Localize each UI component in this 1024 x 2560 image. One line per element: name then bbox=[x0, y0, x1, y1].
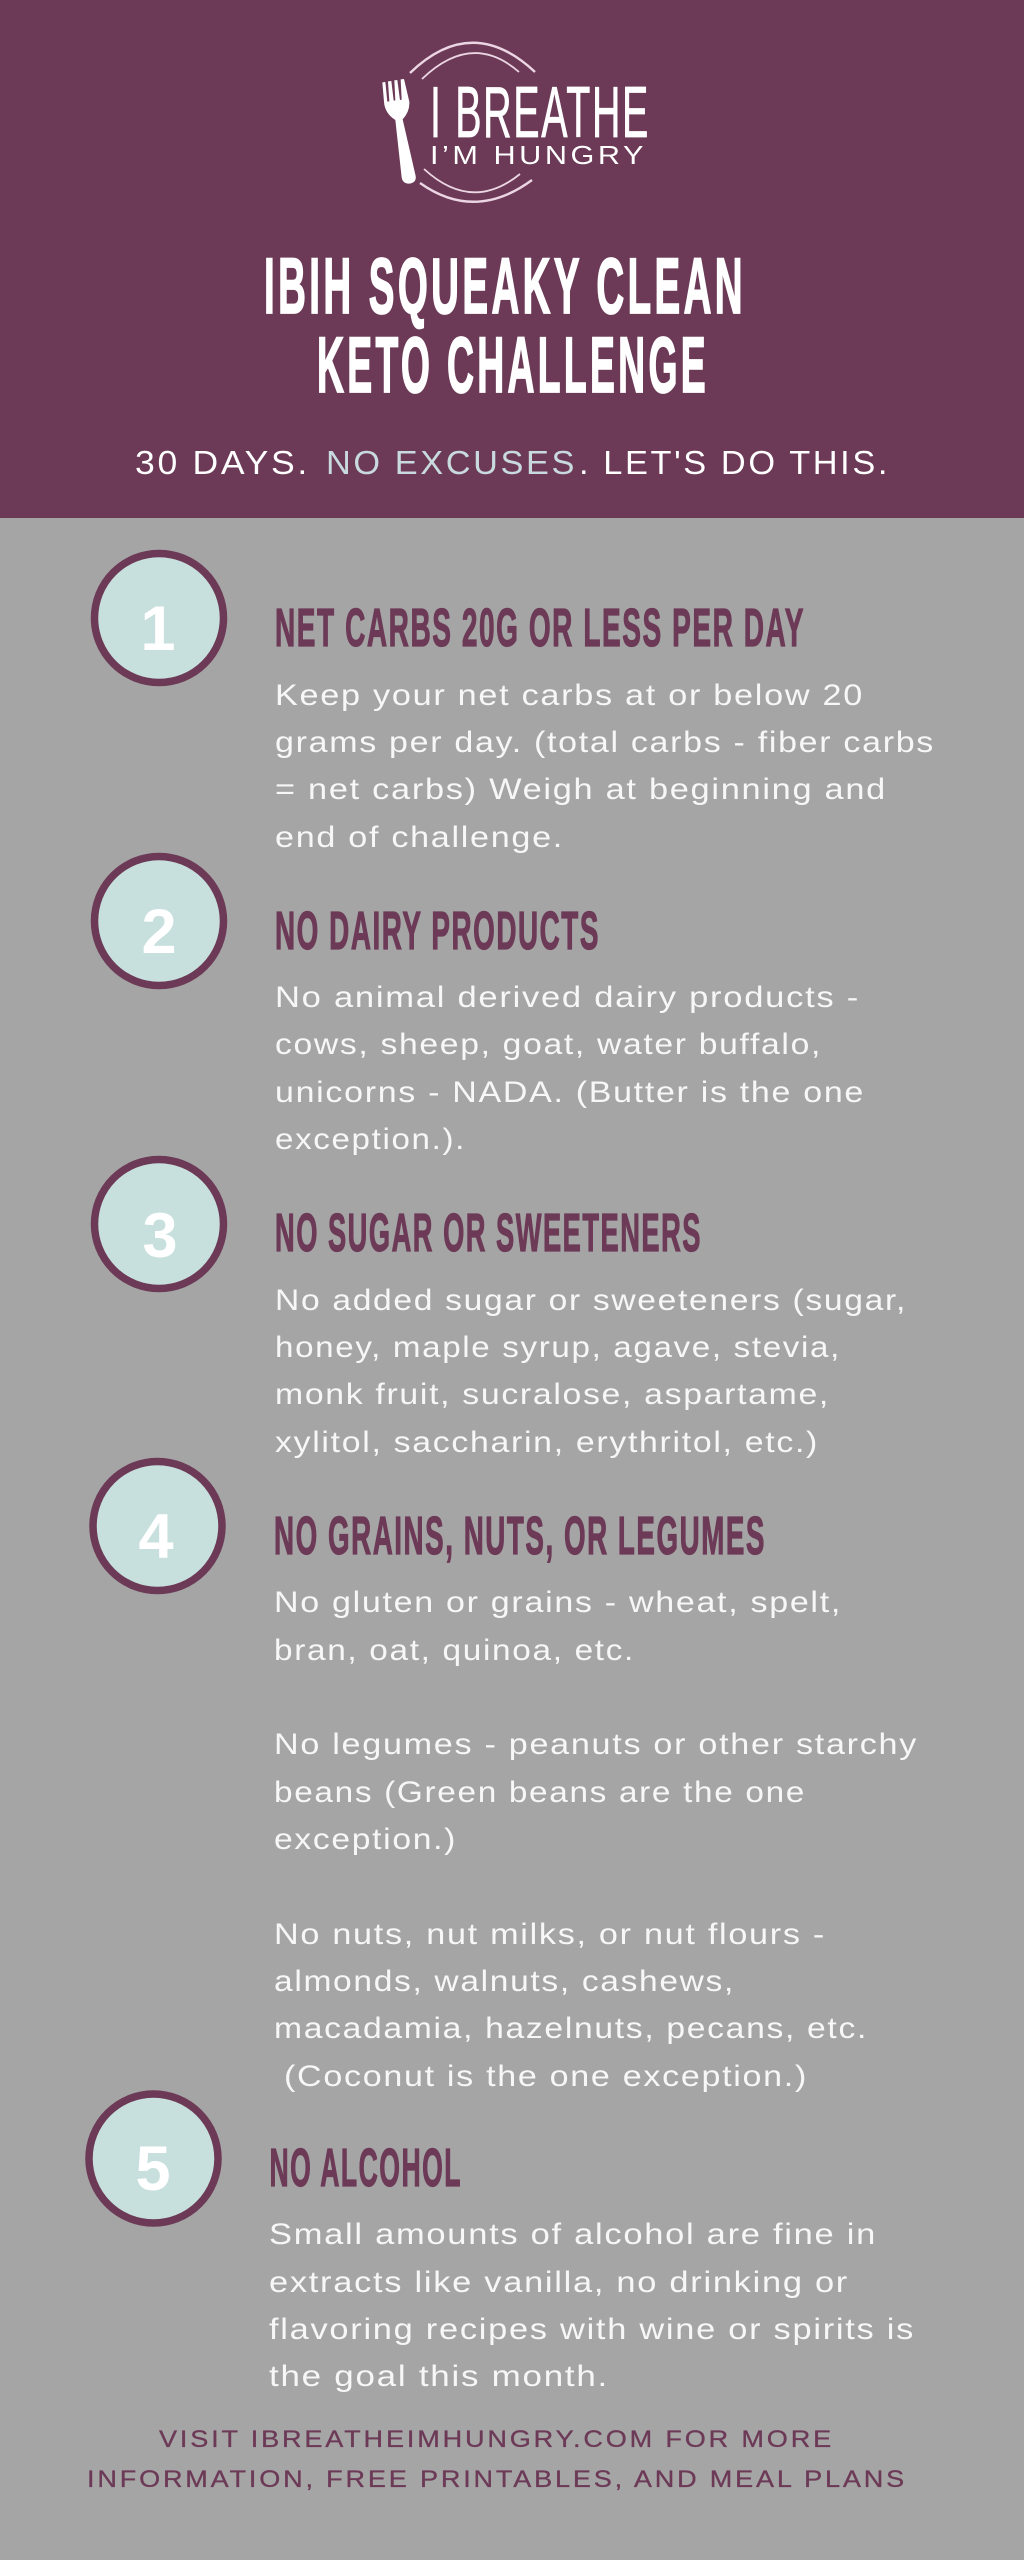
logo text: I Breathe: I BREATHE bbox=[430, 73, 650, 153]
body text: dairy bbox=[275, 981, 865, 1156]
body text: alcohol: flavoring recipes with wine or spirits is bbox=[269, 2313, 915, 2346]
body text: dairy: cows, sheep, goat, water buffalo, bbox=[275, 1028, 822, 1061]
body text: grains: bran, oat, quinoa, etc. bbox=[274, 1634, 635, 1667]
number badge 4 bbox=[93, 1462, 222, 1590]
logo text: I'm Hungry: I’M HUNGRY bbox=[430, 140, 647, 170]
body text: net carbs: grams per day. (total carbs - fiber carbs bbox=[275, 726, 935, 759]
body text: grains: macadamia, hazelnuts, pecans, etc. bbox=[274, 2012, 868, 2045]
number badge 4: 4 bbox=[138, 1502, 174, 1572]
footer call to action: INFORMATION, FREE PRINTABLES, AND MEAL PLANS bbox=[87, 2466, 907, 2493]
body text: sugar: xylitol, saccharin, erythritol, etc.) bbox=[275, 1426, 819, 1459]
body text: grains: No nuts, nut milks, or nut flours - bbox=[274, 1918, 826, 1951]
body text: alcohol: extracts like vanilla, no drinking or bbox=[269, 2266, 849, 2299]
subtitle: . LET'S DO THIS. bbox=[579, 444, 890, 481]
footer call to action: VISIT IBREATHEIMHUNGRY.COM FOR MORE bbox=[159, 2426, 834, 2453]
icon: fork bbox=[382, 79, 416, 184]
body text: alcohol: the goal this month. bbox=[269, 2360, 609, 2393]
title bbox=[264, 241, 746, 409]
number badge 2: 2 bbox=[141, 897, 177, 967]
logo bbox=[382, 43, 650, 202]
body text: net carbs bbox=[275, 679, 935, 854]
body text: sugar bbox=[275, 1284, 907, 1459]
body text: sugar: monk fruit, sucralose, aspartame, bbox=[275, 1378, 830, 1411]
number badge 3 bbox=[94, 1160, 224, 1288]
body text: grains: No legumes - peanuts or other starchy bbox=[274, 1728, 918, 1761]
body text: grains: almonds, walnuts, cashews, bbox=[274, 1965, 735, 1998]
subtitle: NO EXCUSES bbox=[326, 444, 577, 481]
body text: dairy: exception.). bbox=[275, 1123, 466, 1156]
body text: net carbs: end of challenge. bbox=[275, 821, 564, 854]
panel: rule 2 bbox=[94, 856, 865, 1156]
body text: net carbs: = net carbs) Weigh at beginning and bbox=[275, 773, 887, 806]
body text: grains bbox=[274, 1586, 918, 2093]
subtitle: 30 DAYS. bbox=[135, 444, 310, 481]
footer call to action bbox=[87, 2426, 907, 2493]
panel: rule 3 bbox=[94, 1160, 907, 1459]
body text: grains: (Coconut is the one exception.) bbox=[284, 2060, 808, 2093]
number badge 3: 3 bbox=[142, 1201, 178, 1271]
number badge 1 bbox=[94, 554, 224, 682]
panel: rule 5 bbox=[89, 2094, 915, 2393]
body text: grains: beans (Green beans are the one bbox=[274, 1776, 806, 1809]
icon: plate arcs bbox=[410, 43, 535, 202]
heading: dairy: NO DAIRY PRODUCTS bbox=[275, 901, 600, 961]
body text: grains: No gluten or grains - wheat, spelt, bbox=[274, 1586, 842, 1619]
number badge 5: 5 bbox=[135, 2134, 171, 2204]
body text: alcohol bbox=[269, 2218, 915, 2393]
panel: rule 4 bbox=[93, 1462, 918, 2093]
panel: rule 1 bbox=[94, 554, 935, 854]
header panel bbox=[0, 0, 1024, 518]
body text: sugar: honey, maple syrup, agave, stevia, bbox=[275, 1331, 841, 1364]
number badge 2 bbox=[94, 856, 224, 986]
body text: net carbs: Keep your net carbs at or below 20 bbox=[275, 679, 864, 712]
body text: dairy: unicorns - NADA. (Butter is the one bbox=[275, 1076, 865, 1109]
body text: dairy: No animal derived dairy products - bbox=[275, 981, 860, 1014]
body text: alcohol: Small amounts of alcohol are fine in bbox=[269, 2218, 877, 2251]
panel: rule 5: NO ALCOHOL bbox=[270, 2138, 462, 2198]
number badge 1: 1 bbox=[140, 594, 176, 664]
number badge 5 bbox=[89, 2094, 218, 2223]
subtitle bbox=[135, 444, 890, 481]
body text: grains: exception.) bbox=[274, 1823, 457, 1856]
body text: sugar: No added sugar or sweeteners (sugar, bbox=[275, 1284, 907, 1317]
